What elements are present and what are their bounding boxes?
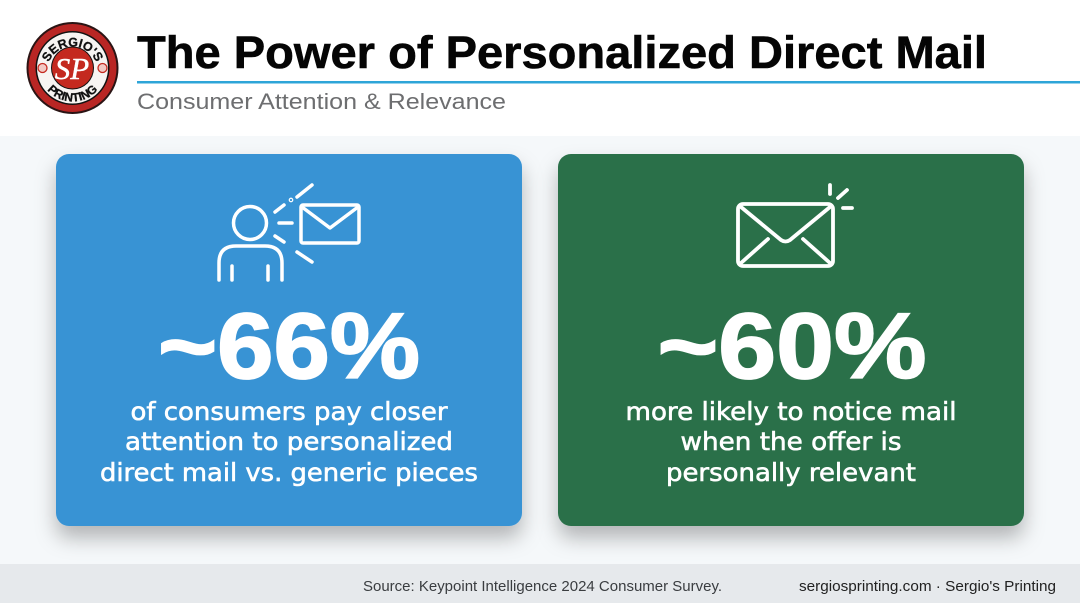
title: The Power of Personalized Direct Mail — [137, 27, 987, 78]
description: more likely to notice mail — [626, 397, 956, 426]
description: personally relevant — [666, 458, 916, 487]
icon: person noticing envelope — [219, 185, 359, 280]
page background — [0, 136, 1080, 564]
description — [100, 397, 478, 487]
title underline — [137, 81, 1080, 84]
header band — [0, 0, 1080, 136]
website credit: sergiosprinting.com · Sergio's Printing — [799, 579, 1056, 595]
stat: ~60%: ~60% — [658, 294, 926, 398]
description: attention to personalized — [125, 427, 453, 456]
description: of consumers pay closer — [130, 397, 448, 426]
description — [626, 397, 956, 487]
panel: 60 percent — [558, 154, 1024, 526]
footer bar — [0, 564, 1080, 603]
description: direct mail vs. generic pieces — [100, 458, 478, 487]
source note: Source: Keypoint Intelligence 2024 Consumer Survey. — [363, 579, 722, 595]
panel: 66 percent — [56, 154, 522, 526]
logo: Sergio's Printing: SERGIO'S — [42, 38, 103, 62]
logo: Sergio's Printing: SP — [55, 51, 89, 86]
icon: envelope with sparkle — [738, 185, 852, 266]
stat: ~66%: ~66% — [158, 294, 420, 398]
description: when the offer is — [680, 427, 902, 456]
logo: Sergio's Printing — [26, 22, 118, 114]
logo: Sergio's Printing: PRINTING — [47, 84, 97, 102]
subtitle: Consumer Attention & Relevance — [137, 89, 506, 114]
